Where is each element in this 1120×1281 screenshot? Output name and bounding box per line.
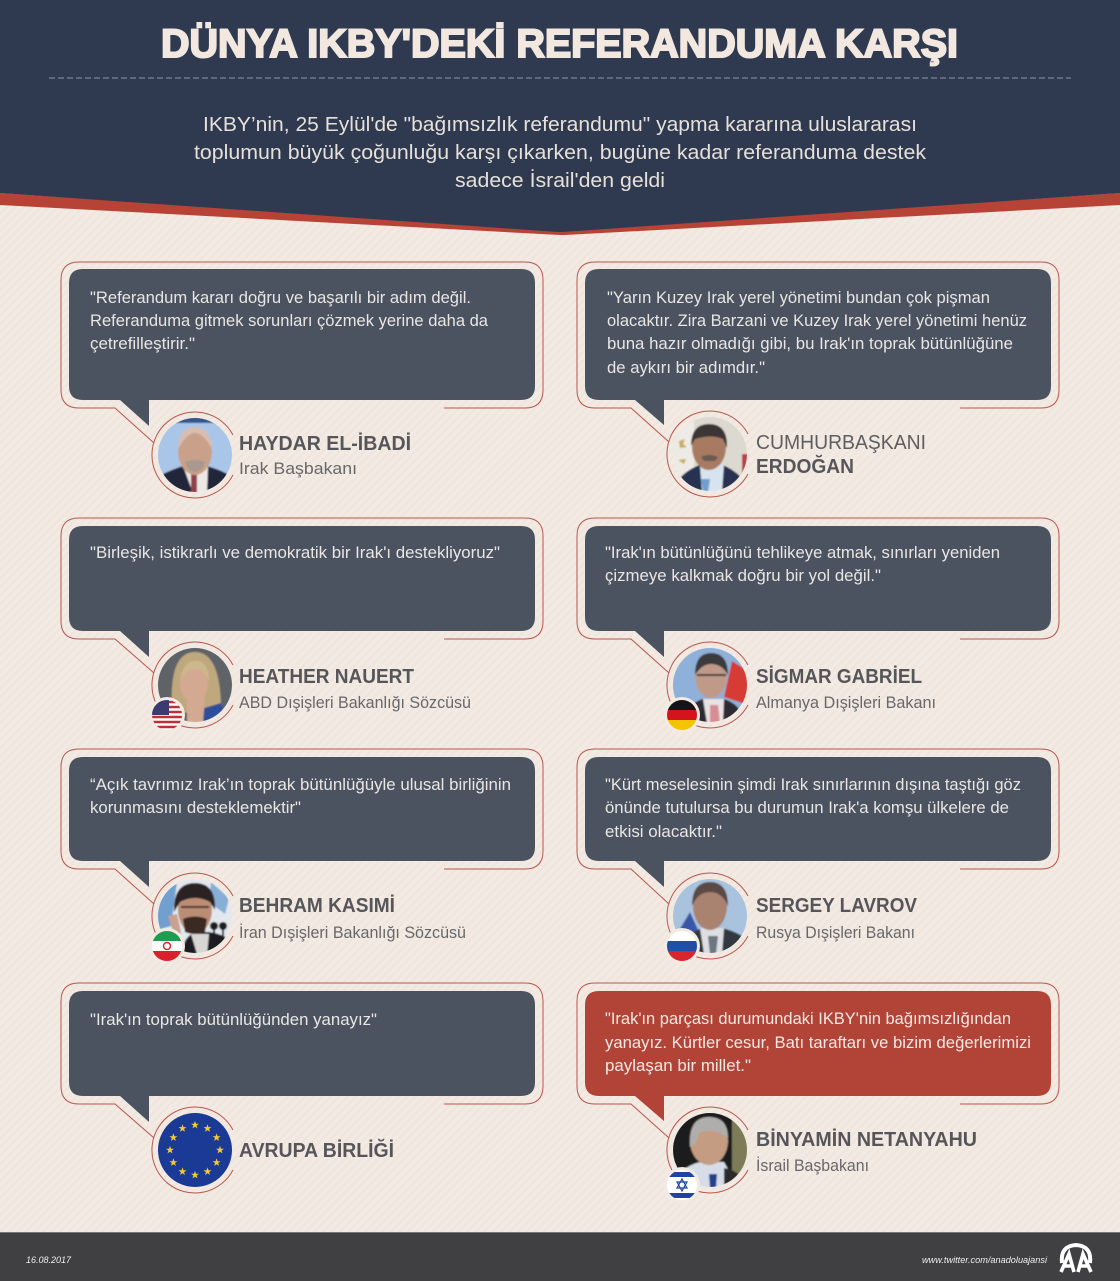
title: Almanya Dışişleri Bakanı xyxy=(756,694,936,712)
speech bubble xyxy=(585,526,1051,657)
name xyxy=(756,432,926,478)
quote: paylaşan bir millet." xyxy=(605,1056,751,1075)
speech bubble xyxy=(585,757,1051,887)
speech bubble xyxy=(69,757,535,887)
title: DÜNYA IKBY'DEKİ REFERANDUMA KARŞI xyxy=(161,21,958,66)
quote: de aykırı bir adımdır." xyxy=(607,358,765,377)
portrait xyxy=(152,873,233,959)
quote: buna hazır olmadığı gibi, bu Irak'ın toprak bütünlüğüne xyxy=(607,334,1013,353)
name: HAYDAR EL-İBADİ xyxy=(239,432,411,455)
quote: yanayız. Kürtler cesur, Batı taraftarı ve bizim değerlerimizi xyxy=(605,1033,1031,1052)
quote: "Kürt meselesinin şimdi Irak sınırlarının dışına taştığı göz xyxy=(605,775,1021,794)
flag: Russia xyxy=(667,928,700,961)
panel: Avrupa Birliği xyxy=(61,983,543,1193)
name: AVRUPA BİRLİĞİ xyxy=(239,1138,394,1162)
flag: Germany xyxy=(667,697,700,730)
portrait xyxy=(667,873,748,959)
portrait xyxy=(152,412,233,498)
quote: "Birleşik, istikrarlı ve demokratik bir Irak'ı destekliyoruz" xyxy=(90,543,500,562)
quote xyxy=(607,288,1027,377)
speech bubble xyxy=(585,991,1051,1121)
speech bubble outline xyxy=(577,262,1059,442)
header banner xyxy=(0,0,1120,235)
speech bubble outline xyxy=(61,983,543,1138)
quote: etkisi olacaktır." xyxy=(605,822,722,841)
quote: "Referandum kararı doğru ve başarılı bir adım değil. xyxy=(90,288,471,307)
name: BEHRAM KASIMİ xyxy=(239,894,395,917)
panel: Sigmar Gabriel xyxy=(577,518,1059,733)
date: 16.08.2017 xyxy=(26,1255,72,1265)
footer bar xyxy=(0,1232,1120,1281)
icon: AA logo xyxy=(1061,1245,1091,1272)
twitter url: www.twitter.com/anadoluajansi xyxy=(922,1255,1048,1265)
panel: Sergey Lavrov xyxy=(577,749,1059,964)
name: HEATHER NAUERT xyxy=(239,666,414,688)
panel: Behram Kasımi xyxy=(61,749,543,964)
flag: Israel xyxy=(667,1167,700,1200)
speech bubble outline xyxy=(61,749,543,904)
quote: çizmeye kalkmak doğru bir yol değil." xyxy=(605,566,881,585)
title: Rusya Dışişleri Bakanı xyxy=(756,924,915,942)
quote xyxy=(90,775,511,817)
panel: Binyamin Netanyahu xyxy=(577,983,1059,1203)
quote: olacaktır. Zira Barzani ve Kuzey Irak yerel yönetimi henüz xyxy=(607,311,1027,330)
intro text xyxy=(194,114,927,192)
quote: "Irak'ın parçası durumundaki IKBY'nin bağımsızlığından xyxy=(605,1009,1011,1028)
intro text: sadece İsrail'den geldi xyxy=(455,169,665,192)
name: BİNYAMİN NETANYAHU xyxy=(756,1128,977,1151)
quote: çetrefilleştirir." xyxy=(90,334,195,353)
name: ERDOĞAN xyxy=(756,454,854,478)
quote: önünde tutulursa bu durumun Irak'a komşu ülkelere de xyxy=(605,798,1009,817)
speech bubble outline xyxy=(61,262,543,443)
quote: Referanduma gitmek sorunları çözmek yerine daha da xyxy=(90,311,489,330)
title: Irak Başbakanı xyxy=(239,460,357,478)
name: SERGEY LAVROV xyxy=(756,895,918,917)
title: İsrail Başbakanı xyxy=(756,1156,869,1175)
quote: "Irak'ın toprak bütünlüğünden yanayız" xyxy=(90,1010,377,1029)
speech bubble xyxy=(69,269,535,426)
portrait xyxy=(667,411,748,497)
speech bubble xyxy=(69,526,535,657)
panel: Erdoğan xyxy=(577,262,1059,497)
speech bubble outline xyxy=(61,518,543,673)
name: CUMHURBAŞKANI xyxy=(756,432,926,454)
quote: "Yarın Kuzey Irak yerel yönetimi bundan çok pişman xyxy=(607,288,990,307)
panel: Haydar el-İbadi xyxy=(61,262,543,498)
quote: “Açık tavrımız Irak’ın toprak bütünlüğüyle ulusal birliğinin xyxy=(90,775,511,794)
icon: EU flag xyxy=(152,1107,233,1193)
portrait xyxy=(152,642,233,728)
title: ABD Dışişleri Bakanlığı Sözcüsü xyxy=(239,694,471,712)
quote: korunmasını desteklemektir" xyxy=(90,798,301,817)
speech bubble xyxy=(585,269,1051,425)
speech bubble outline xyxy=(577,983,1059,1138)
quote xyxy=(605,775,1021,841)
speech bubble outline xyxy=(577,749,1059,904)
quote xyxy=(605,543,1000,585)
portrait xyxy=(667,642,748,728)
quote xyxy=(90,288,489,353)
quote: "Irak'ın bütünlüğünü tehlikeye atmak, sınırları yeniden xyxy=(605,543,1000,562)
quote xyxy=(605,1009,1031,1075)
name: SİGMAR GABRİEL xyxy=(756,665,922,688)
panel: Heather Nauert xyxy=(61,518,543,733)
title: İran Dışişleri Bakanlığı Sözcüsü xyxy=(239,923,466,942)
speech bubble outline xyxy=(577,518,1059,673)
flag: USA xyxy=(152,697,185,730)
speech bubble xyxy=(69,991,535,1122)
intro text: IKBY’nin, 25 Eylül'de "bağımsızlık referandumu" yapma kararına uluslararası xyxy=(203,114,917,136)
flag: Iran xyxy=(152,928,185,961)
portrait xyxy=(667,1107,748,1193)
intro text: toplumun büyük çoğunluğu karşı çıkarken, bugüne kadar referanduma destek xyxy=(194,142,927,164)
